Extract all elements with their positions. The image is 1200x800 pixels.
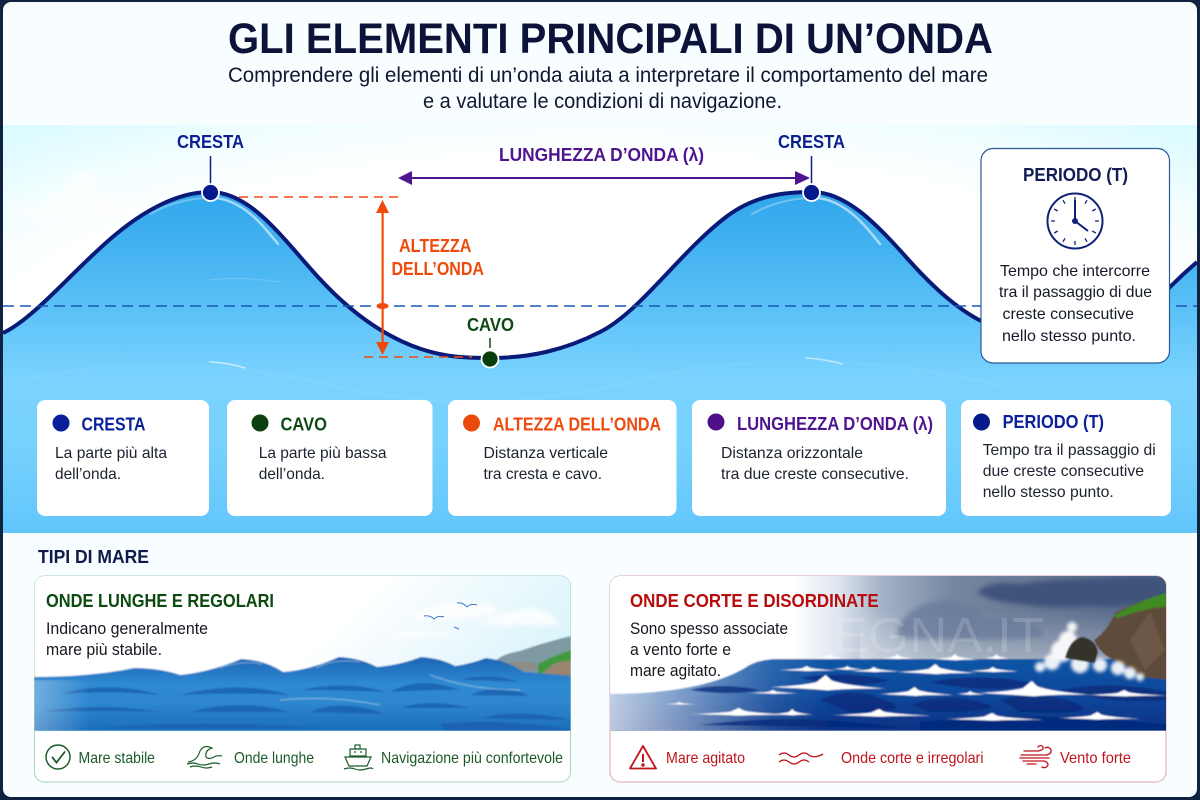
- text: onde corte description: Sono spesso associate: [630, 620, 788, 638]
- marker: second crest: [778, 131, 845, 201]
- label: altezza dell'onda: [392, 236, 484, 279]
- title: GLI ELEMENTI PRINCIPALI DI UN’ONDA: [228, 15, 993, 63]
- wave outline: [3, 192, 1197, 358]
- sky background: [3, 125, 1197, 533]
- subtitle: [228, 64, 988, 113]
- illustration: calm sea: [30, 572, 575, 735]
- card: cresta: [37, 400, 209, 516]
- text: onde corte description: [630, 620, 788, 680]
- label: onde lunghe: Onde lunghe: [234, 750, 314, 767]
- card: cavo: CAVO: [280, 414, 327, 434]
- height dashed guides: [239, 197, 472, 357]
- icon: seagulls: [424, 603, 477, 629]
- icon: warning: [630, 746, 656, 768]
- card: cavo: La parte più bassa: [259, 445, 387, 462]
- card: lunghezza: [692, 400, 946, 516]
- illustration: stormy sea: [606, 572, 1170, 735]
- sea: [30, 657, 575, 735]
- card: cavo: [227, 400, 432, 516]
- label: altezza dell'onda: DELL’ONDA: [392, 259, 484, 279]
- label: mare stabile: Mare stabile: [78, 750, 155, 767]
- text: periodo description: creste consecutive: [1002, 306, 1134, 323]
- icon: wind: [1020, 746, 1051, 768]
- marker: trough: CAVO: [467, 315, 514, 335]
- water body: [3, 192, 1197, 533]
- marker: first crest: [177, 131, 244, 201]
- hills: [496, 635, 570, 674]
- icon: check: [46, 745, 70, 769]
- text: periodo description: Tempo che intercorre: [1000, 263, 1150, 280]
- card: cresta: La parte più alta: [55, 445, 167, 462]
- card: periodo: nello stesso punto.: [983, 484, 1114, 501]
- text: onde corte description: mare agitato.: [630, 662, 721, 680]
- icon: long wave: [187, 747, 222, 768]
- label: vento forte: Vento forte: [1060, 750, 1131, 767]
- rock: [1065, 637, 1098, 663]
- cloud: [10, 170, 140, 218]
- title: onde lunghe: ONDE LUNGHE E REGOLARI: [46, 590, 274, 611]
- text: onde corte description: a vento forte e: [630, 641, 731, 659]
- panel: periodo: [981, 148, 1170, 363]
- label: lunghezza d'onda: LUNGHEZZA D’ONDA (λ): [499, 145, 704, 165]
- marker: first crest: CRESTA: [177, 131, 244, 152]
- label: altezza dell'onda: ALTEZZA: [399, 236, 472, 256]
- cliff: [1094, 599, 1166, 681]
- panel: wave diagram: [3, 125, 1197, 533]
- label: navigazione: Navigazione più confortevole: [381, 750, 563, 767]
- card: cavo: dell’onda.: [259, 466, 325, 483]
- card: cresta: dell’onda.: [55, 466, 121, 483]
- heading: tipi di mare: TIPI DI MARE: [38, 547, 149, 567]
- text: onde lunghe description: [46, 620, 208, 659]
- watermark: EGNA.IT: [833, 609, 1044, 663]
- card: cresta: CRESTA: [82, 414, 146, 434]
- text: onde lunghe description: Indicano generalmente: [46, 620, 208, 638]
- text: periodo description: [999, 263, 1152, 345]
- storm clouds: [977, 577, 1170, 607]
- icon: clock: [1048, 194, 1102, 248]
- header: [228, 15, 993, 113]
- panel: onde corte e disordinate: [606, 572, 1170, 782]
- card: altezza: [448, 400, 676, 516]
- card: periodo: Tempo tra il passaggio di: [983, 442, 1156, 459]
- card: lunghezza: Distanza orizzontale: [721, 445, 863, 462]
- arrow: wavelength: [398, 171, 810, 185]
- label: mare agitato: Mare agitato: [666, 750, 745, 767]
- card: altezza: ALTEZZA DELL’ONDA: [493, 414, 661, 434]
- card: periodo: PERIODO (T): [1003, 412, 1104, 432]
- icon: ship: [344, 745, 373, 770]
- text: onde lunghe description: mare più stabile.: [46, 641, 162, 659]
- text: periodo description: nello stesso punto.: [1002, 328, 1136, 345]
- icon: short waves: [779, 753, 823, 764]
- label: onde corte: Onde corte e irregolari: [841, 750, 984, 767]
- panel: periodo: PERIODO (T): [1023, 164, 1128, 185]
- mean water line: [3, 305, 1197, 307]
- card: lunghezza: tra due creste consecutive.: [721, 466, 909, 483]
- marker: trough: [467, 315, 514, 368]
- panel: onde lunghe e regolari: [30, 572, 575, 782]
- text: periodo description: tra il passaggio di due: [999, 284, 1152, 301]
- card: periodo: due creste consecutive: [983, 463, 1144, 480]
- title: onde corte: ONDE CORTE E DISORDINATE: [630, 590, 879, 611]
- marker: second crest: CRESTA: [778, 131, 845, 152]
- card: altezza: Distanza verticale: [484, 445, 608, 462]
- card: altezza: tra cresta e cavo.: [484, 466, 602, 483]
- card: lunghezza: LUNGHEZZA D’ONDA (λ): [737, 414, 933, 434]
- arrow: wave height: [376, 200, 389, 355]
- subtitle: e a valutare le condizioni di navigazione.: [423, 90, 782, 113]
- water highlights: [30, 198, 1000, 401]
- sea: [606, 659, 1170, 735]
- whitecaps: [689, 708, 793, 716]
- card: periodo: [961, 400, 1171, 516]
- subtitle: Comprendere gli elementi di un’onda aiuta a interpretare il comportamento del mare: [228, 64, 988, 87]
- spray: [1035, 622, 1144, 681]
